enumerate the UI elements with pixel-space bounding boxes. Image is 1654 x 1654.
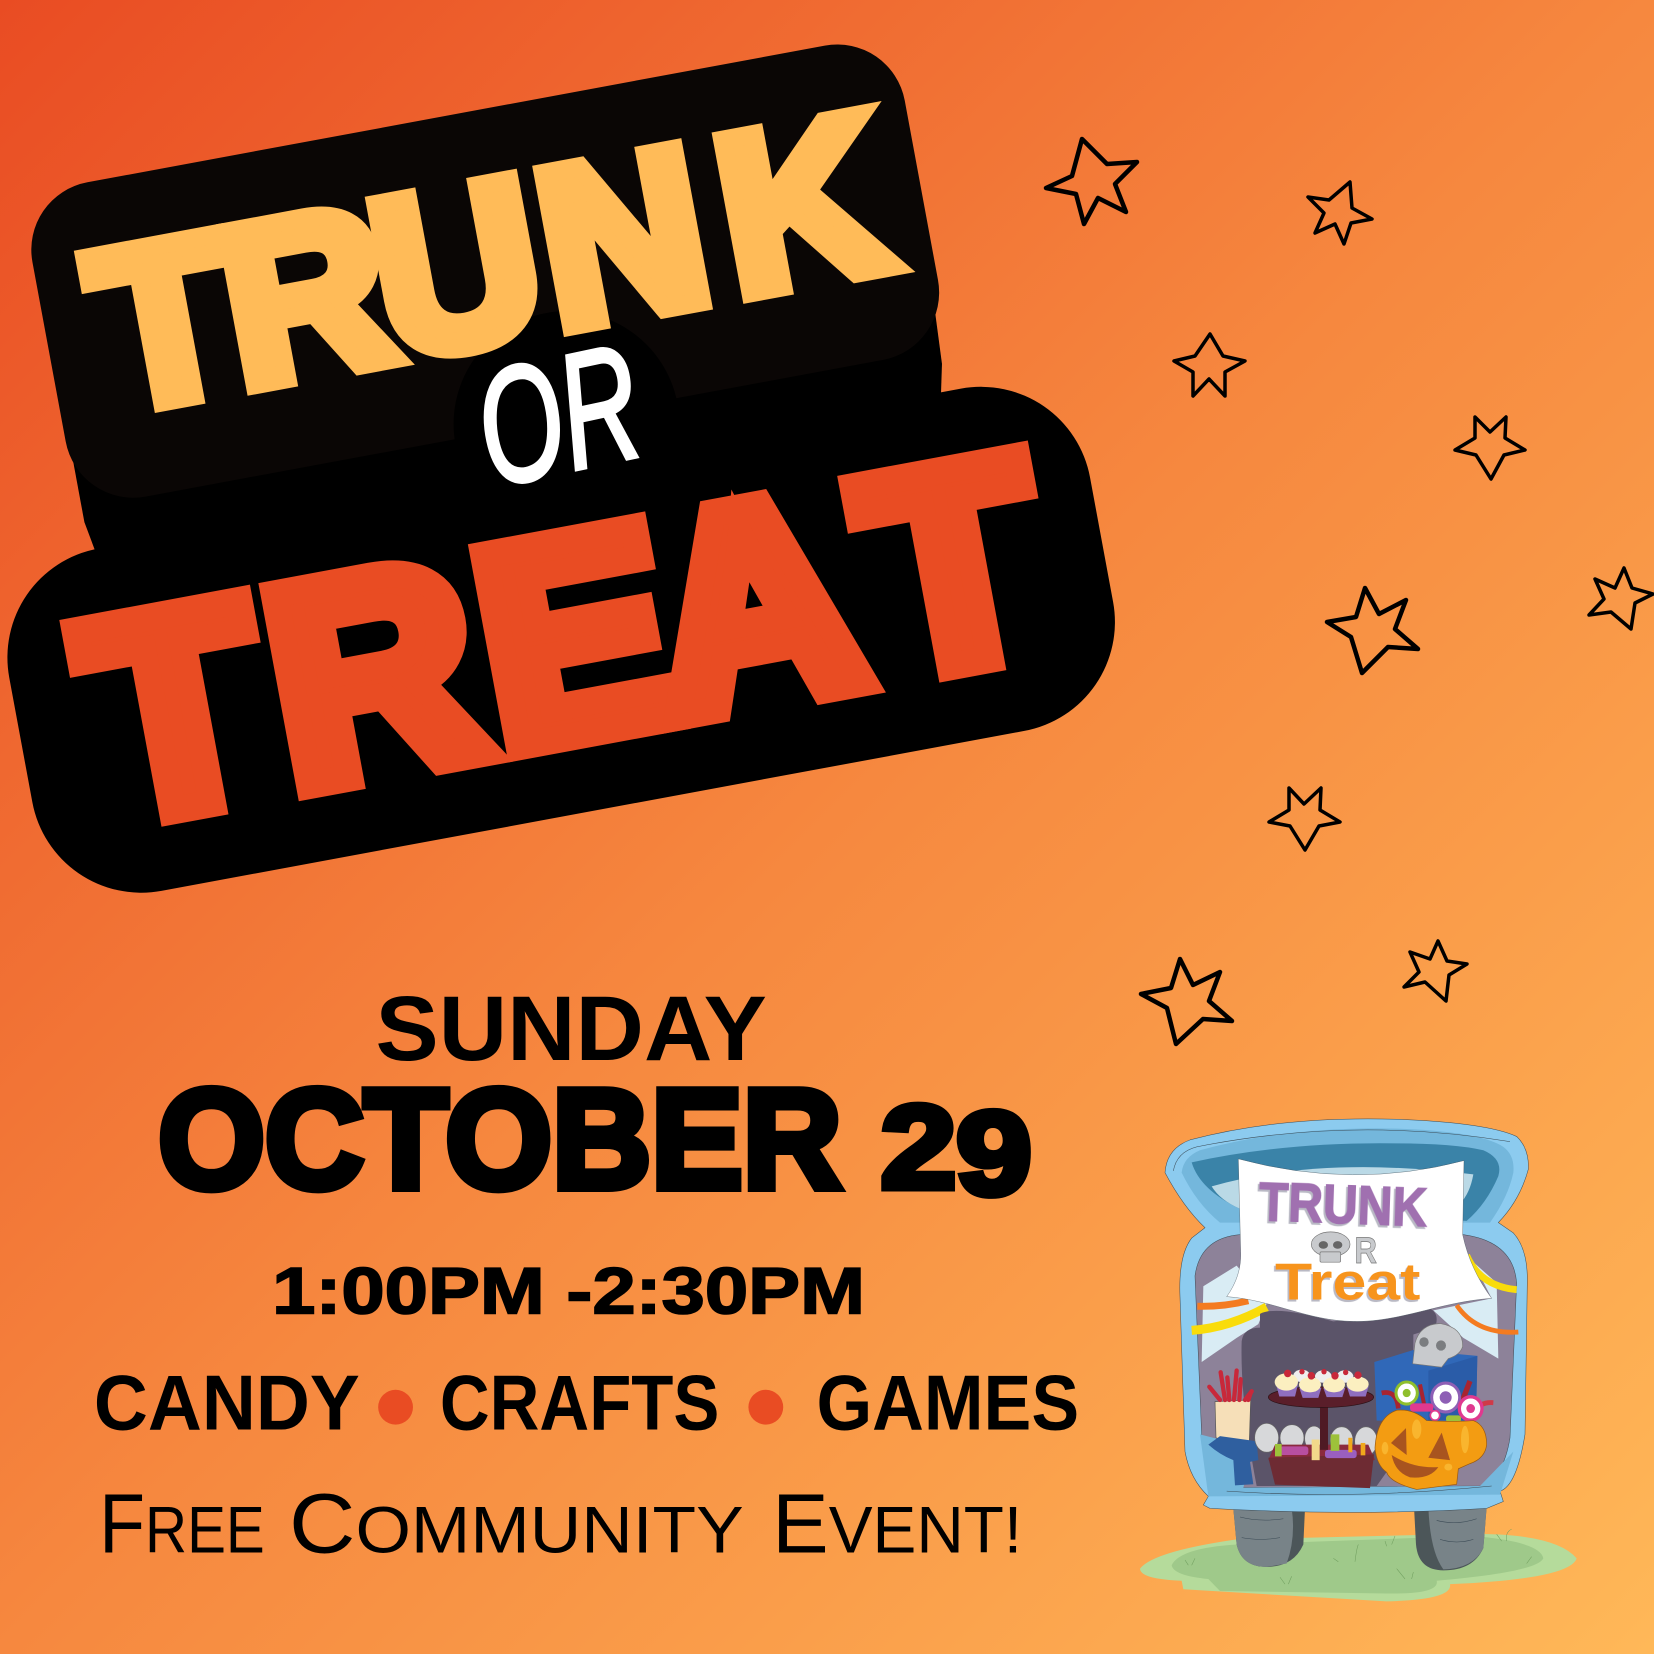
- stars: [1046, 139, 1653, 1044]
- banner text: r: R: [1354, 1229, 1377, 1271]
- wheel left: [1233, 1508, 1305, 1567]
- date: 29: 29: [881, 1082, 1032, 1220]
- date: october: OCTOBER: [158, 1060, 842, 1218]
- wheel right: [1414, 1507, 1487, 1570]
- seat: [1242, 1309, 1437, 1486]
- activity: candy: CANDY: [94, 1358, 360, 1446]
- glass: [1212, 1167, 1473, 1209]
- star 6: [1589, 568, 1653, 629]
- banner text: treat: Treat: [1275, 1253, 1420, 1311]
- star 1: [1046, 139, 1137, 224]
- pumpkin: [1375, 1410, 1487, 1489]
- star 9: [1141, 959, 1232, 1044]
- cupcakes: [1275, 1369, 1369, 1398]
- book: [1374, 1350, 1477, 1421]
- free community event line: EVENT!: [772, 1477, 1022, 1571]
- activity: crafts: CRAFTS: [440, 1358, 719, 1446]
- plate: trunk: [20, 33, 950, 509]
- star 5: [1327, 588, 1418, 673]
- title block: [0, 33, 1133, 911]
- circle behind or: [454, 311, 679, 537]
- plate: treat: [0, 368, 1133, 911]
- candy box: [1268, 1434, 1375, 1488]
- star 3: [1174, 334, 1245, 396]
- grass: [1140, 1534, 1577, 1601]
- illustration: car trunk: [1140, 1119, 1577, 1601]
- bullet: [748, 1390, 783, 1425]
- trunk interior: [1195, 1235, 1517, 1488]
- heading: treat: TREAT: [61, 395, 1066, 882]
- rear window: [1192, 1143, 1499, 1221]
- lollipops and candy: [1382, 1381, 1493, 1422]
- star 8: [1404, 941, 1467, 1001]
- car body: [1165, 1119, 1528, 1512]
- activity: games: GAMES: [816, 1358, 1079, 1446]
- star 7: [1269, 788, 1340, 850]
- hand jar: [1209, 1371, 1252, 1442]
- icon: skull on book: [1413, 1323, 1463, 1367]
- free community event line: FREE: [99, 1477, 265, 1571]
- streamers: [1192, 1255, 1518, 1332]
- banner: [1227, 1159, 1492, 1321]
- star 4: [1455, 417, 1525, 479]
- star 2: [1308, 182, 1372, 244]
- event details: [94, 978, 1079, 1571]
- icon: banner skull: [1311, 1232, 1350, 1262]
- curtains: [1202, 1262, 1498, 1362]
- black backing between plates: [72, 301, 942, 564]
- bullet: [378, 1390, 413, 1425]
- blue stool: [1208, 1436, 1258, 1485]
- detail lines: [1173, 1130, 1532, 1584]
- small skulls: [1255, 1423, 1377, 1456]
- free community event line: COMMUNITY: [289, 1477, 744, 1571]
- banner text: trunk: TRUNK: [1258, 1171, 1428, 1238]
- time: 1:00PM -2:30PM: [272, 1254, 865, 1327]
- lower blue sill: [1200, 1434, 1513, 1496]
- lid inner: [1182, 1128, 1514, 1223]
- day: SUNDAY: [376, 978, 767, 1080]
- heading: or: OR: [461, 309, 656, 522]
- cake stand: [1268, 1387, 1374, 1450]
- free community event line: [99, 1477, 1022, 1571]
- heading: trunk: TRUNK: [73, 65, 905, 459]
